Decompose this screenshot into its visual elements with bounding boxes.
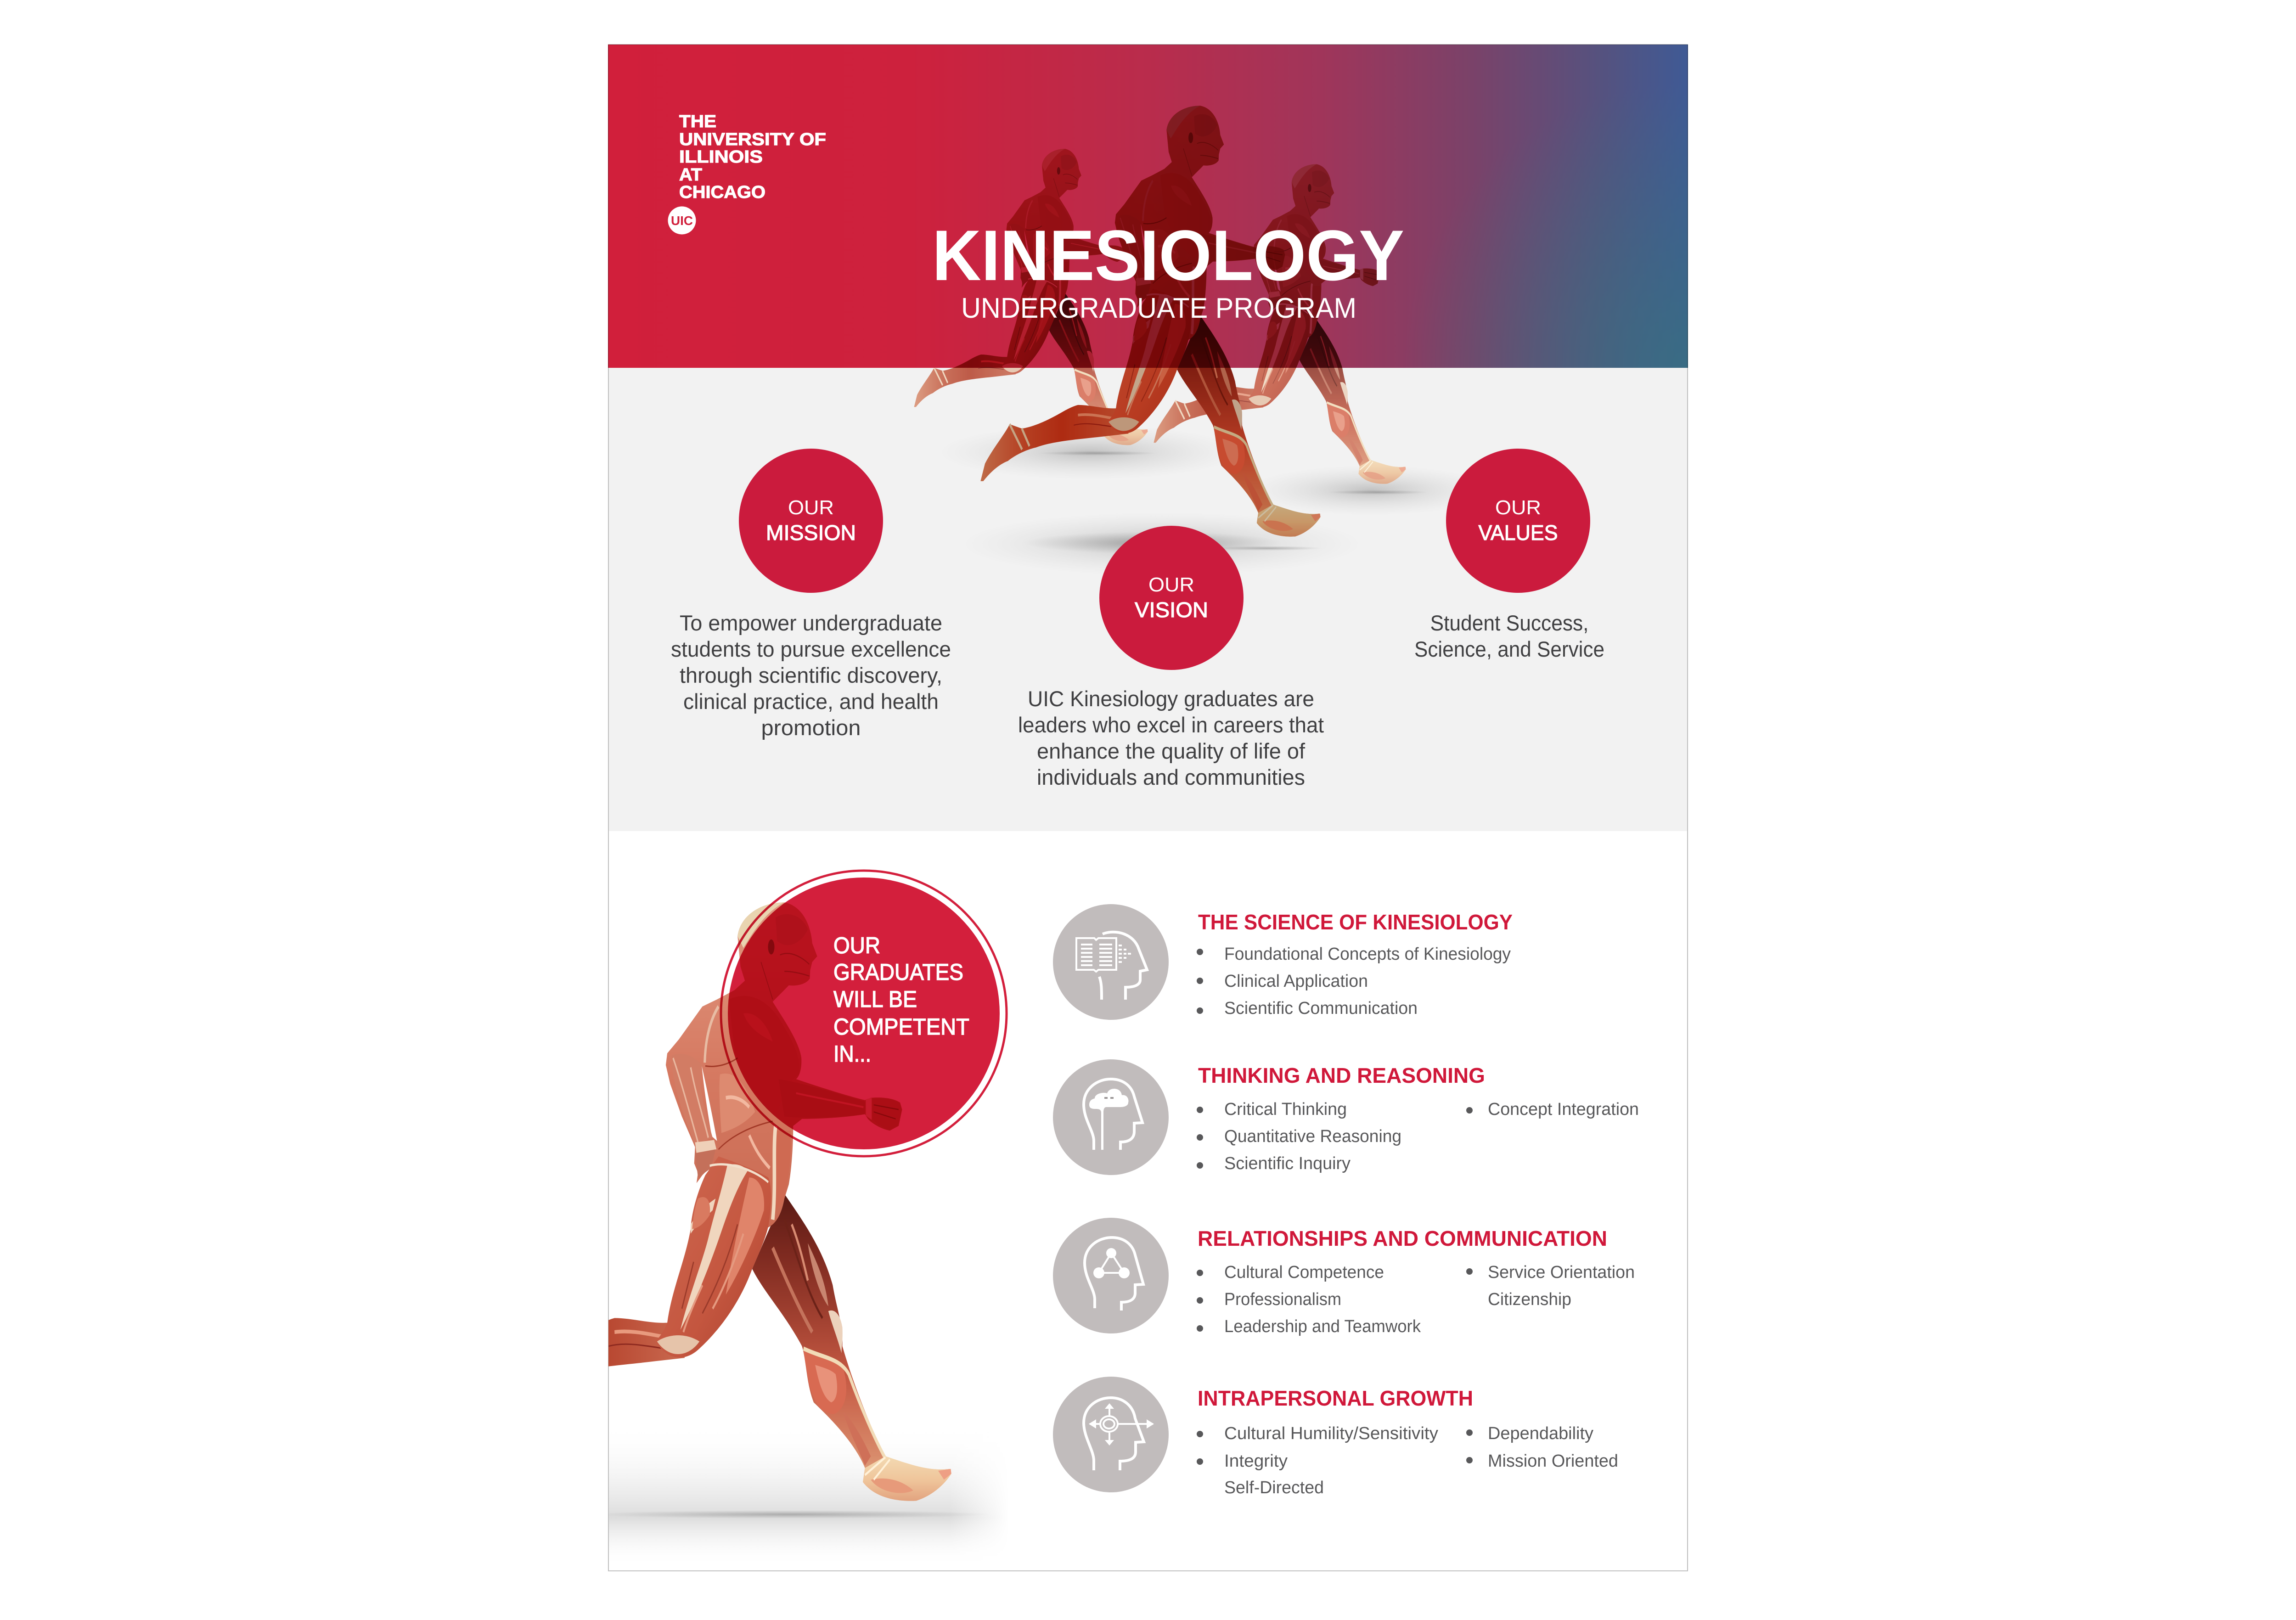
UIC wordmark logo: AT	[679, 165, 702, 185]
mission text: students to pursue excellence	[671, 637, 951, 661]
list: science of kinesiology: Foundational Concepts of Kinesiology	[1224, 945, 1511, 964]
vision text: enhance the quality of life of	[1037, 739, 1306, 763]
infographic poster	[608, 44, 1688, 1571]
vision text: leaders who excel in careers that	[1018, 713, 1324, 737]
graduates competency circle: COMPETENT	[833, 1014, 969, 1040]
floor shadow under large runner	[609, 1469, 996, 1543]
graduates competency circle: WILL BE	[833, 986, 917, 1012]
our vision badge: OUR	[1148, 574, 1194, 596]
values text	[1414, 611, 1604, 661]
list: intrapersonal growth	[1197, 1424, 1618, 1497]
vision text	[1018, 686, 1324, 789]
mission text: through scientific discovery,	[680, 663, 942, 687]
our values badge	[1446, 449, 1590, 593]
graduates competency circle: OUR	[833, 933, 880, 958]
graduates competency circle	[721, 871, 1007, 1156]
three anatomical runners	[914, 106, 1406, 537]
icon: head with open book	[1053, 904, 1169, 1020]
poster outline	[608, 45, 1688, 1571]
list: relationships and communication: Cultural Competence	[1224, 1263, 1384, 1282]
our vision badge	[1099, 526, 1244, 670]
graduates competency circle: IN...	[833, 1041, 871, 1067]
list: relationships and communication	[1197, 1263, 1635, 1336]
graduates competency circle: GRADUATES	[833, 959, 963, 985]
our mission badge: MISSION	[766, 521, 856, 545]
subtitle: UNDERGRADUATE PROGRAM	[961, 292, 1356, 324]
mission text: clinical practice, and health	[683, 689, 939, 714]
list: intrapersonal growth: Mission Oriented	[1488, 1451, 1618, 1471]
UIC wordmark logo: UIC	[671, 214, 693, 228]
list: science of kinesiology: Scientific Communication	[1224, 999, 1418, 1018]
UIC wordmark logo: THE	[679, 112, 716, 131]
UIC wordmark logo: UNIVERSITY OF	[679, 130, 826, 149]
heading: thinking and reasoning: THINKING AND REASONING	[1198, 1063, 1485, 1087]
list: intrapersonal growth: Cultural Humility/Sensitivity	[1224, 1424, 1438, 1443]
our vision badge: VISION	[1135, 598, 1208, 622]
heading: relationships and communication: RELATIONSHIPS AND COMMUNICATION	[1198, 1226, 1607, 1250]
list: thinking and reasoning: Quantitative Reasoning	[1224, 1127, 1401, 1146]
heading: intrapersonal growth: INTRAPERSONAL GROWTH	[1198, 1386, 1473, 1410]
list: thinking and reasoning	[1197, 1100, 1639, 1173]
icon: head with brain cloud	[1053, 1059, 1169, 1175]
panel: header gradient	[608, 45, 1688, 368]
list: relationships and communication: Leadership and Teamwork	[1224, 1317, 1421, 1336]
list: intrapersonal growth: Dependability	[1488, 1424, 1593, 1443]
vision text: UIC Kinesiology graduates are	[1028, 686, 1314, 711]
list: thinking and reasoning: Scientific Inquiry	[1224, 1154, 1351, 1173]
icon: head with network triangle	[1053, 1218, 1169, 1333]
UIC wordmark logo: ILLINOIS	[679, 147, 763, 167]
icon: head with compass arrows	[1053, 1377, 1169, 1492]
values text: Science, and Service	[1414, 637, 1604, 661]
list: relationships and communication: Professionalism	[1224, 1290, 1341, 1309]
mission text: To empower undergraduate	[680, 611, 942, 635]
our values badge: OUR	[1495, 496, 1541, 519]
our mission badge	[739, 449, 883, 593]
list: thinking and reasoning: Concept Integration	[1488, 1100, 1639, 1119]
list: intrapersonal growth: Self-Directed	[1224, 1478, 1324, 1497]
values text: Student Success,	[1430, 611, 1589, 635]
panel: mission vision values background	[608, 368, 1688, 831]
runners darkened inside the header	[953, 114, 1379, 368]
heading: science of kinesiology: THE SCIENCE OF KINESIOLOGY	[1198, 910, 1513, 934]
list: science of kinesiology	[1197, 945, 1511, 1018]
mission text: promotion	[761, 715, 861, 740]
list: science of kinesiology: Clinical Application	[1224, 972, 1368, 991]
our values badge: VALUES	[1479, 521, 1558, 545]
shadows under header runners	[938, 425, 1495, 576]
list: relationships and communication: Citizenship	[1488, 1290, 1571, 1309]
large anatomical runner	[608, 902, 951, 1501]
UIC wordmark logo	[668, 112, 826, 234]
list: relationships and communication: Service Orientation	[1488, 1263, 1635, 1282]
title: KINESIOLOGY	[932, 216, 1404, 296]
list: thinking and reasoning: Critical Thinking	[1224, 1100, 1347, 1119]
vision text: individuals and communities	[1037, 765, 1305, 789]
list: intrapersonal growth: Integrity	[1224, 1451, 1288, 1471]
our mission badge: OUR	[788, 496, 834, 519]
UIC wordmark logo: CHICAGO	[679, 183, 765, 202]
mission text	[671, 611, 951, 740]
